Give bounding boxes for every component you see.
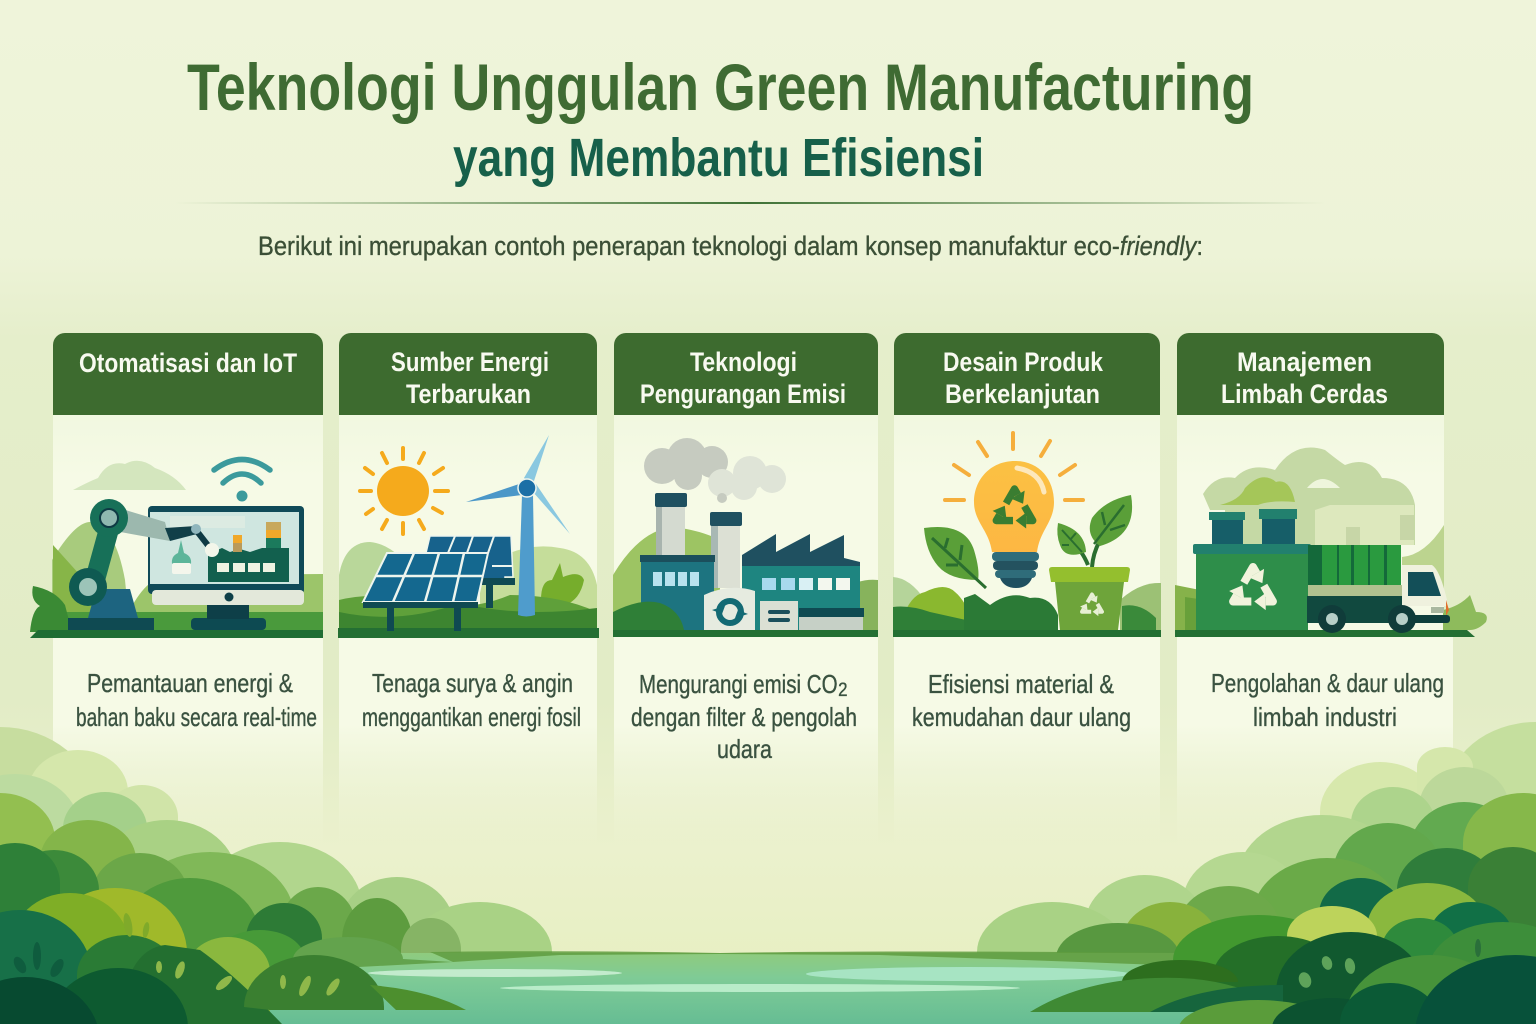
heading: Manajemen: [1237, 347, 1372, 377]
landscape: right back hills: [977, 722, 1536, 1024]
description: Mengurangi emisi CO₂: [639, 663, 848, 701]
panel: Desain Produk Berkelanjutan: [893, 333, 1161, 845]
heading: [339, 333, 597, 415]
icon: light bulb: [945, 433, 1083, 588]
landscape: left back hills: [0, 727, 552, 1024]
heading: Terbarukan: [406, 379, 531, 409]
description: [76, 668, 317, 732]
heading: Limbah Cerdas: [1221, 379, 1388, 409]
description: dengan filter & pengolah: [631, 702, 857, 732]
heading: Berkelanjutan: [945, 379, 1100, 409]
icon: potted plant: [1049, 495, 1132, 630]
leaf accents: [122, 912, 342, 998]
illustration: sun, solar panel and wind turbine: [338, 435, 599, 638]
description: Tenaga surya & angin: [372, 668, 573, 698]
icon: wifi: [214, 460, 270, 502]
landscape: left front hills: [0, 843, 466, 1024]
river: [0, 951, 1536, 1024]
description: Pemantauan energi &: [87, 668, 293, 698]
intro text: Berikut ini merupakan contoh penerapan teknologi dalam konsep manufaktur eco-friendly:: [258, 231, 1203, 261]
description: Pengolahan & daur ulang: [1211, 668, 1444, 698]
panel: Sumber Energi Terbarukan: [338, 333, 599, 845]
illustration: recycling bin and truck: [1175, 448, 1487, 637]
panel: Manajemen Limbah Cerdas: [1175, 333, 1487, 845]
description: [362, 668, 581, 732]
icon: leaf: [924, 527, 986, 588]
illustration: factory with filter: [613, 438, 878, 637]
illustration: light bulb and plant: [893, 433, 1161, 637]
description: [912, 669, 1131, 732]
heading: Otomatisasi dan IoT: [79, 348, 297, 378]
description: bahan baku secara real-time: [76, 702, 317, 732]
heading: Sumber Energi: [391, 347, 549, 377]
heading: [1177, 333, 1444, 415]
heading: [614, 333, 878, 415]
description: [631, 663, 857, 764]
title: Teknologi Unggulan Green Manufacturing: [187, 50, 1254, 124]
panel: Otomatisasi dan IoT: [30, 333, 323, 845]
description: Efisiensi material &: [928, 669, 1114, 699]
description: udara: [717, 734, 772, 764]
icon: sun: [360, 448, 448, 534]
landscape: right front hills: [1030, 902, 1536, 1024]
illustration: robot arm and monitor: [30, 460, 323, 638]
leaf accents: [1297, 955, 1356, 990]
panel: Teknologi Pengurangan Emisi: [613, 333, 878, 845]
icon: smoke clouds: [644, 438, 786, 503]
heading: Pengurangan Emisi: [640, 379, 846, 409]
description: menggantikan energi fosil: [362, 702, 581, 732]
icon: solar panel: [363, 536, 515, 631]
title: [187, 50, 1254, 188]
icon: wind turbine: [466, 435, 570, 616]
description: [1211, 668, 1444, 732]
description: limbah industri: [1253, 702, 1397, 732]
heading: Teknologi: [690, 347, 797, 377]
title: yang Membantu Efisiensi: [453, 128, 984, 188]
heading: [53, 333, 323, 415]
description: kemudahan daur ulang: [912, 702, 1131, 732]
heading: Desain Produk: [943, 347, 1104, 377]
heading: [894, 333, 1160, 415]
